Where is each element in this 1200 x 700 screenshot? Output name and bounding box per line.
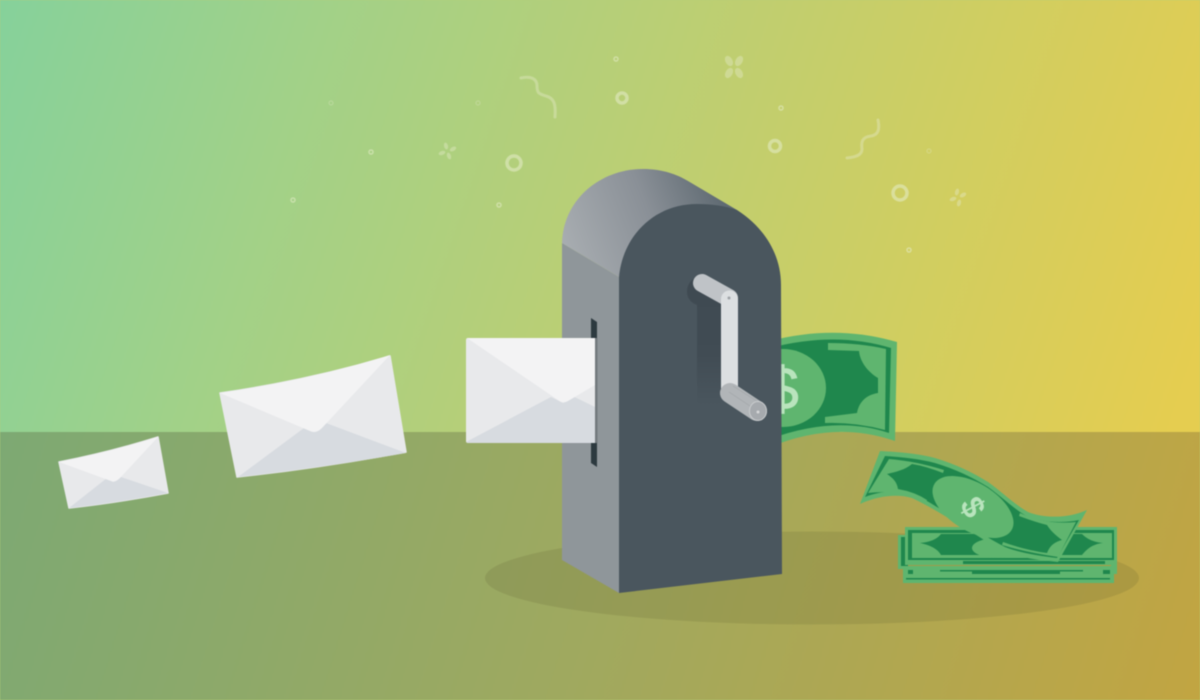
small envelope bbox=[59, 437, 168, 508]
upper dollar bill emerging from machine bbox=[740, 333, 897, 447]
crank upper shaft bbox=[702, 283, 729, 298]
machine front face bbox=[619, 204, 782, 593]
crank grip bbox=[729, 386, 766, 420]
decorative confetti bbox=[291, 54, 967, 252]
dollar sign on lower bill: $ bbox=[953, 491, 993, 523]
dollar sign on upper bill: $ bbox=[765, 355, 799, 422]
large envelope entering slot bbox=[466, 338, 598, 443]
background: ground bbox=[0, 432, 1200, 700]
money stack bbox=[898, 527, 1117, 583]
insertion slot bbox=[591, 318, 597, 467]
machine bbox=[562, 169, 782, 593]
machine side wall bbox=[562, 243, 619, 593]
crank shadow bbox=[687, 277, 722, 405]
background: sky gradient bbox=[0, 0, 1200, 433]
lower falling dollar bill bbox=[860, 451, 1087, 562]
medium envelope bbox=[220, 355, 406, 477]
machine rounded roof bbox=[562, 169, 737, 300]
crank arm bbox=[721, 299, 738, 392]
machine ground shadow bbox=[485, 532, 1139, 624]
